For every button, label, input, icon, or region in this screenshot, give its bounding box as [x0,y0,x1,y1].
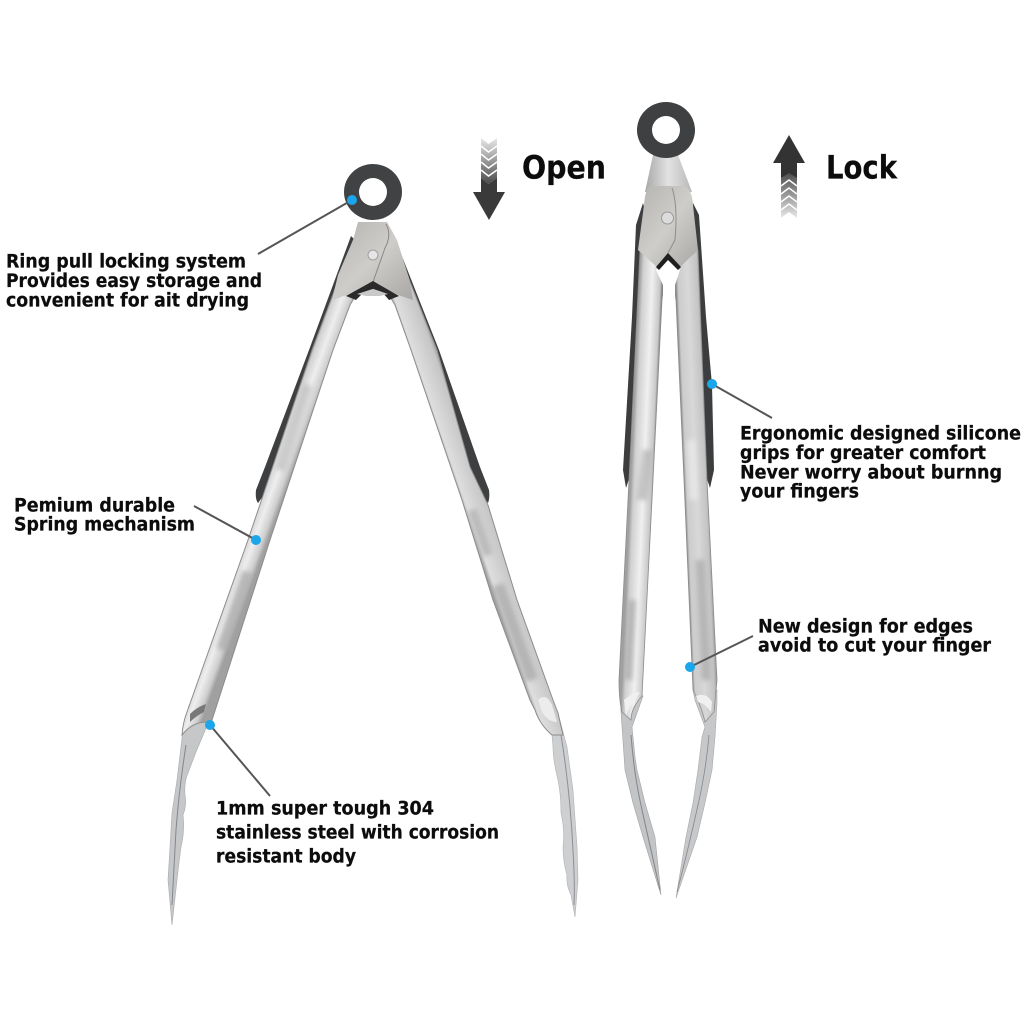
locked tongs [619,102,717,898]
arm shading: right [472,510,532,680]
hinge plate [332,222,413,300]
tip crease: right [561,735,574,905]
callout text [6,252,262,312]
steel arm: right [380,236,563,735]
open arrow [473,138,505,220]
scalloped tip: right [535,690,578,917]
arrow stripes [481,146,497,176]
silicone grip: left [623,203,645,488]
neck [645,155,692,192]
hinge plate [638,186,698,267]
callout text: avoid to cut your finger [758,636,992,656]
callout text: Spring mechanism [14,514,195,536]
callout text [758,616,992,656]
callout text: convenient for ait drying [6,290,249,312]
steel arm: left [182,236,365,735]
callout text: Provides easy storage and [6,271,262,292]
marker dot [205,720,215,730]
lock label: Lock [826,148,898,186]
callout text: Ring pull locking system [6,252,246,272]
hinge seam [668,188,676,253]
silicone grip: right [690,203,714,488]
callout text: New design for edges [758,616,973,638]
tip bend highlights [624,692,712,716]
tip crease: right [677,735,709,892]
hinge rivet [662,212,674,224]
hinge rivet [368,250,378,260]
callout: silicone grips [707,379,1021,502]
ring handle [344,164,402,220]
tip: left [620,690,661,895]
tip bend highlight: right [538,697,557,722]
arrow head [473,178,505,220]
hinge gap [656,260,680,300]
hinge seam [373,224,389,282]
marker dot [707,379,717,389]
steel arm: right [668,250,717,722]
tip: right [676,690,717,898]
arrow chevrons [481,138,497,184]
arrow chevrons [781,172,797,218]
callout text: Never worry about burnng [740,462,1002,484]
notch insert [357,289,388,296]
callout text: 1mm super tough 304 [216,798,434,820]
arm shading: left [222,385,308,650]
callout: ring pull [6,195,357,312]
silicone grip: left [256,236,360,503]
callout text: stainless steel with corrosion [216,822,499,844]
silicone grip: right [385,236,489,503]
tip crease: left [631,735,660,890]
callout: stainless steel [205,720,499,868]
leader line [194,506,256,540]
leader line [690,636,753,667]
callout: spring mechanism [14,496,261,545]
leader line [712,384,772,418]
tip crease: left [172,745,186,905]
steel arm: left [619,250,668,720]
marker dot [251,535,261,545]
callout: edges [685,616,992,672]
open label: Open [522,148,606,186]
hinge notch [346,281,399,300]
lock arrow [773,135,805,218]
callout text: resistant body [216,846,356,868]
scalloped tip: left [168,700,207,925]
tip bend shading: left [190,704,206,722]
callout text [216,798,499,868]
ring handle [637,102,695,158]
hinge notch [656,253,681,270]
arm shading [628,440,706,680]
leader line [210,725,270,796]
callout text: your fingers [740,482,859,502]
callout text: grips for greater comfort [740,443,986,464]
marker dot [685,662,695,672]
callout text: Pemium durable [14,496,175,516]
open tongs [168,164,578,925]
arrow stripes [781,180,797,210]
leader line [258,200,352,254]
callout text [740,424,1021,502]
marker dot [347,195,357,205]
callout text [14,496,195,536]
arrow head [773,135,805,178]
